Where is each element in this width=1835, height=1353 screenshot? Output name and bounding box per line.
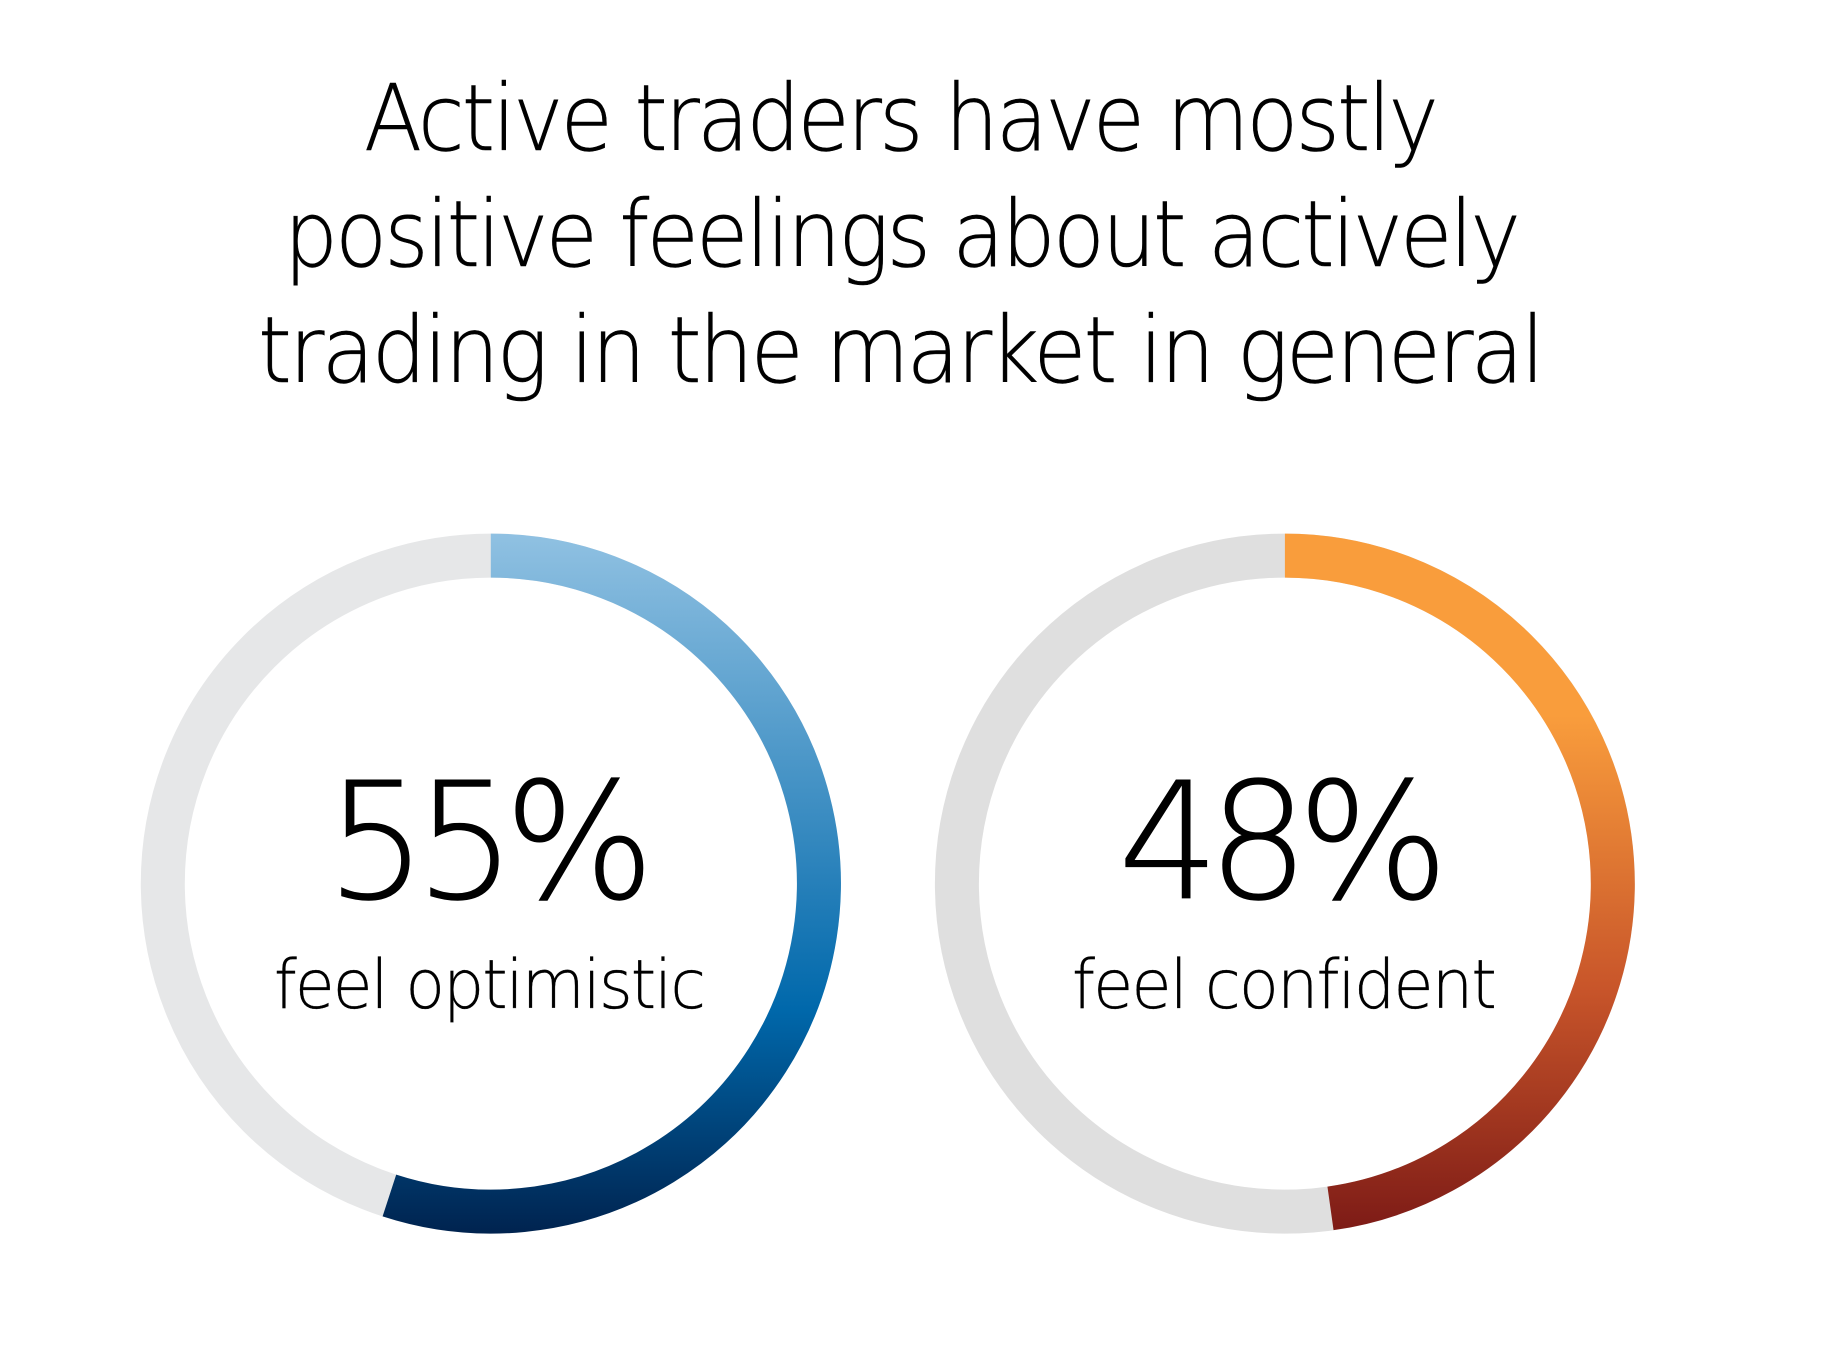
- label: feel confident: feel confident: [1072, 946, 1495, 1025]
- title: trading in the market in general: [258, 297, 1542, 404]
- ring track: confident: [957, 556, 1613, 1212]
- title: [258, 65, 1542, 404]
- value: 55%: 55%: [326, 749, 643, 937]
- ring value arc: 55%: [389, 556, 819, 1212]
- title: Active traders have mostly: [364, 65, 1436, 172]
- ring value arc: 48%: [1285, 556, 1613, 1208]
- label: feel optimistic: feel optimistic: [274, 946, 704, 1025]
- panel: 48% feel confident: [957, 556, 1613, 1212]
- title: positive feelings about actively: [284, 181, 1518, 288]
- ring track: optimistic: [163, 556, 819, 1212]
- panel: 55% feel optimistic: [163, 556, 819, 1212]
- value: 48%: 48%: [1118, 749, 1437, 937]
